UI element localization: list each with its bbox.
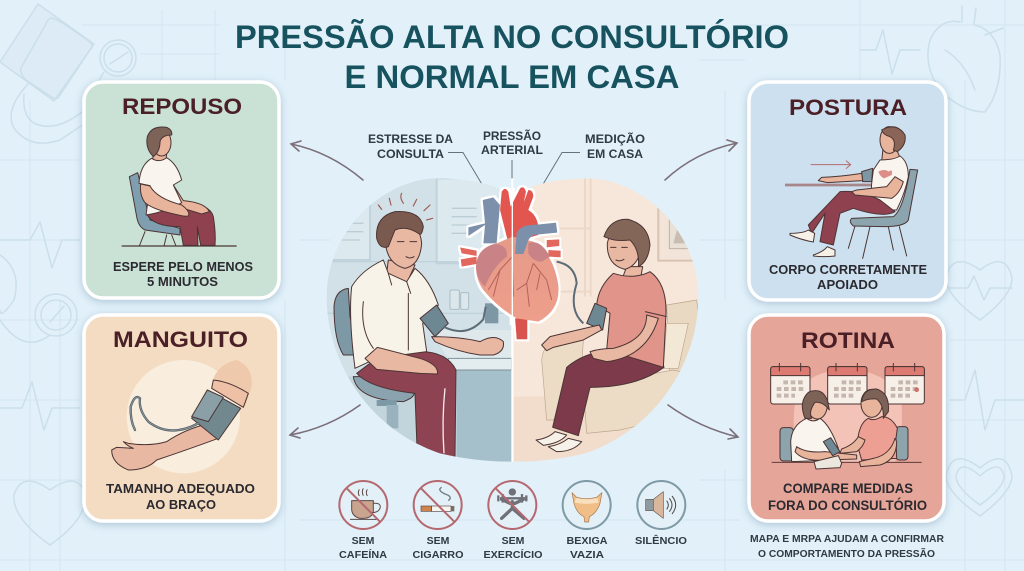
icon: sem cigarro: CIGARRO	[412, 549, 464, 561]
note: mapa e mrpa: MAPA E MRPA AJUDAM A CONFIRMAR	[750, 533, 944, 545]
caption	[769, 263, 927, 292]
caption: TAMANHO ADEQUADO	[106, 482, 255, 496]
arrow: to manguito	[290, 405, 360, 438]
label: medição em casa	[585, 131, 645, 161]
icon: sem cigarro	[412, 481, 464, 561]
heading: repouso: REPOUSO	[122, 94, 242, 119]
panel: manguito	[84, 315, 279, 521]
icon: sem cafeína: SEM	[352, 535, 375, 547]
illustration: arm with cuff	[112, 360, 252, 473]
icon: sem exercício: SEM	[502, 535, 525, 547]
icon: sem exercício	[484, 481, 542, 561]
panel: postura	[749, 82, 946, 300]
icon: sem cafeína: CAFEÍNA	[339, 548, 387, 561]
caption: COMPARE MEDIDAS	[783, 480, 913, 496]
icon: bexiga vazia: BEXIGA	[566, 535, 608, 547]
label: medição em casa: EM CASA	[587, 147, 643, 161]
caption	[113, 260, 253, 289]
icon: heart	[460, 187, 561, 339]
label: medição em casa: MEDIÇÃO	[585, 131, 645, 146]
label: estresse da consulta	[368, 132, 453, 161]
illustration: supported posture	[785, 127, 918, 258]
label: pressão arterial	[481, 128, 543, 157]
caption: AO BRAÇO	[146, 498, 216, 512]
illustration: seated person	[122, 127, 237, 246]
icon: bexiga vazia	[563, 481, 611, 561]
icons row	[339, 481, 687, 561]
illustration: routine calendars and two women	[771, 363, 924, 469]
arrow: to repouso	[291, 141, 363, 180]
arrow: to postura	[665, 140, 737, 180]
central labels	[368, 128, 645, 186]
label: pressão arterial: PRESSÃO	[483, 128, 541, 143]
title	[235, 19, 789, 95]
caption: CORPO CORRETAMENTE	[769, 263, 927, 277]
heading: manguito: MANGUITO	[113, 327, 248, 352]
central illustration	[320, 177, 707, 463]
icon: sem cigarro: SEM	[427, 535, 450, 547]
heading: postura: POSTURA	[789, 95, 907, 120]
caption	[768, 480, 927, 513]
note: mapa e mrpa: O COMPORTAMENTO DA PRESSÃO	[758, 547, 935, 560]
icon: bexiga vazia: VAZIA	[570, 549, 604, 561]
note: mapa e mrpa	[750, 533, 944, 560]
panel: rotina	[749, 315, 944, 521]
icon: sem exercício: EXERCÍCIO	[484, 548, 542, 561]
label: estresse da consulta: CONSULTA	[377, 147, 444, 161]
caption: 5 MINUTOS	[147, 275, 218, 289]
caption: FORA DO CONSULTÓRIO	[768, 496, 927, 513]
label: pressão arterial: ARTERIAL	[481, 143, 543, 157]
title: PRESSÃO ALTA NO CONSULTÓRIO	[235, 19, 789, 55]
decorative cuff	[0, 4, 94, 101]
heading: rotina: ROTINA	[801, 328, 895, 353]
label: estresse da consulta: ESTRESSE DA	[368, 132, 453, 146]
caption: ESPERE PELO MENOS	[113, 260, 253, 274]
caption: APOIADO	[817, 278, 878, 292]
decorative heart top right	[928, 6, 1003, 112]
panel: repouso	[84, 82, 279, 298]
scene: clinic	[320, 177, 513, 463]
arrow: to rotina	[668, 405, 738, 439]
icon: silêncio: SILÊNCIO	[635, 534, 687, 547]
icon: sem cafeína	[339, 481, 387, 561]
caption	[106, 482, 255, 512]
title: E NORMAL EM CASA	[344, 59, 680, 95]
scene: home	[513, 177, 707, 463]
icon: silêncio	[635, 481, 687, 547]
